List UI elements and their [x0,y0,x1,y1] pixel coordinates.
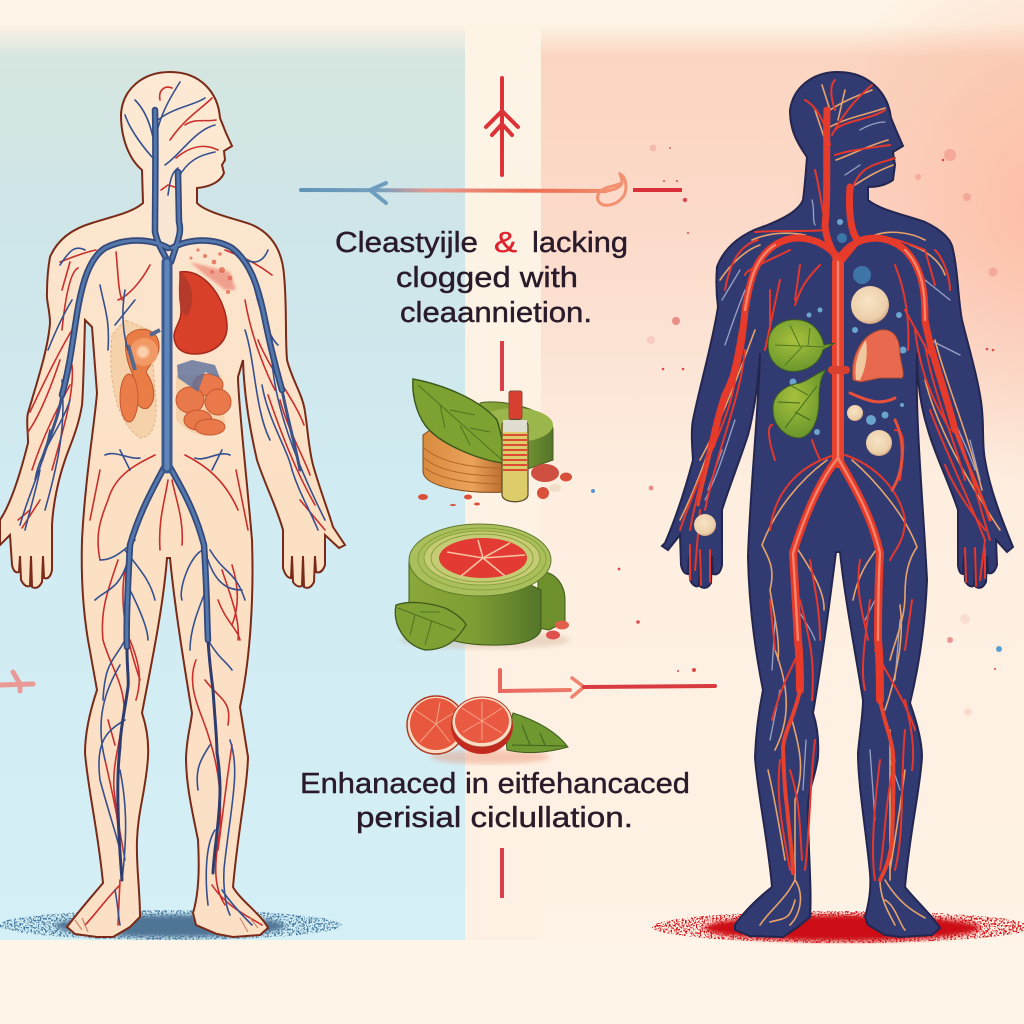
figure: healthy body [662,72,1013,937]
text: top caption: cleaannietion. [400,297,592,329]
leaf [395,602,466,650]
slice right [451,697,513,754]
thin blue veins [20,82,325,925]
blue droplets [790,219,906,435]
foot lines [75,918,258,932]
arrow: L-shaped bottom right [500,670,715,697]
crumbs [418,464,572,506]
curved artery, lower torso [850,393,902,490]
main red artery tree [698,110,990,880]
leaf [413,379,504,463]
text: bottom caption [300,768,690,834]
decoration: scattered red particles [591,144,1002,716]
silhouette [662,72,1013,937]
organ highlight [855,340,867,380]
stomach / heart organ [174,262,236,354]
green cylinder [480,402,553,470]
panel: centre cream strip [465,25,541,940]
artery band [828,366,850,374]
text: top caption: & [494,227,517,259]
figure: clogged body [0,72,345,937]
arrow: small pink left [0,672,33,691]
organ: salmon [853,330,903,382]
nutrient balls [694,286,892,536]
text: top caption: Cleastyijle [335,227,478,259]
roll side tab [538,572,565,630]
bottle [502,391,528,502]
text: top caption [335,227,628,329]
arrow: bottom vertical [500,848,504,898]
arrow: mid vertical [500,341,504,391]
leaf upper [768,320,835,371]
arrow: top vertical [486,78,518,175]
leaf lower [773,370,826,438]
roll body [409,560,541,645]
floor shadow: blue speckled [0,910,342,940]
chest spots [190,248,232,294]
floor shadow: red splatter [652,911,1024,943]
neck tube [160,190,177,255]
icon: leaf, cylinder and bottle [413,379,572,506]
leaf [507,713,568,753]
arrow: red dash [633,188,682,192]
text: bottom caption: Enhanaced in eitfehancaced [300,768,690,800]
thin red vessels [680,80,990,880]
slice left [407,696,465,754]
roll top [409,524,551,596]
thin red arteries [18,87,325,925]
arrow: horizontal blue to orange [301,174,626,205]
intestines [111,320,231,438]
main blue vein tree [42,110,300,880]
crumbs [555,620,569,630]
text: top caption: clogged with [396,262,578,294]
icon: fruit slices and leaf [407,696,568,764]
pale vein lines [705,122,980,820]
thin tan veins [680,85,1000,930]
rings [418,528,546,590]
orange cylinder [423,430,505,492]
fruit centre [439,538,527,578]
text: bottom caption: perisial ciclullation. [356,802,633,834]
icon: green roll with red fruit [395,524,570,650]
panel: healthy side, peach [541,0,1024,940]
silhouette [0,72,345,937]
text: top caption: lacking [532,227,628,259]
panel: clogged side, pale blue [0,25,465,940]
